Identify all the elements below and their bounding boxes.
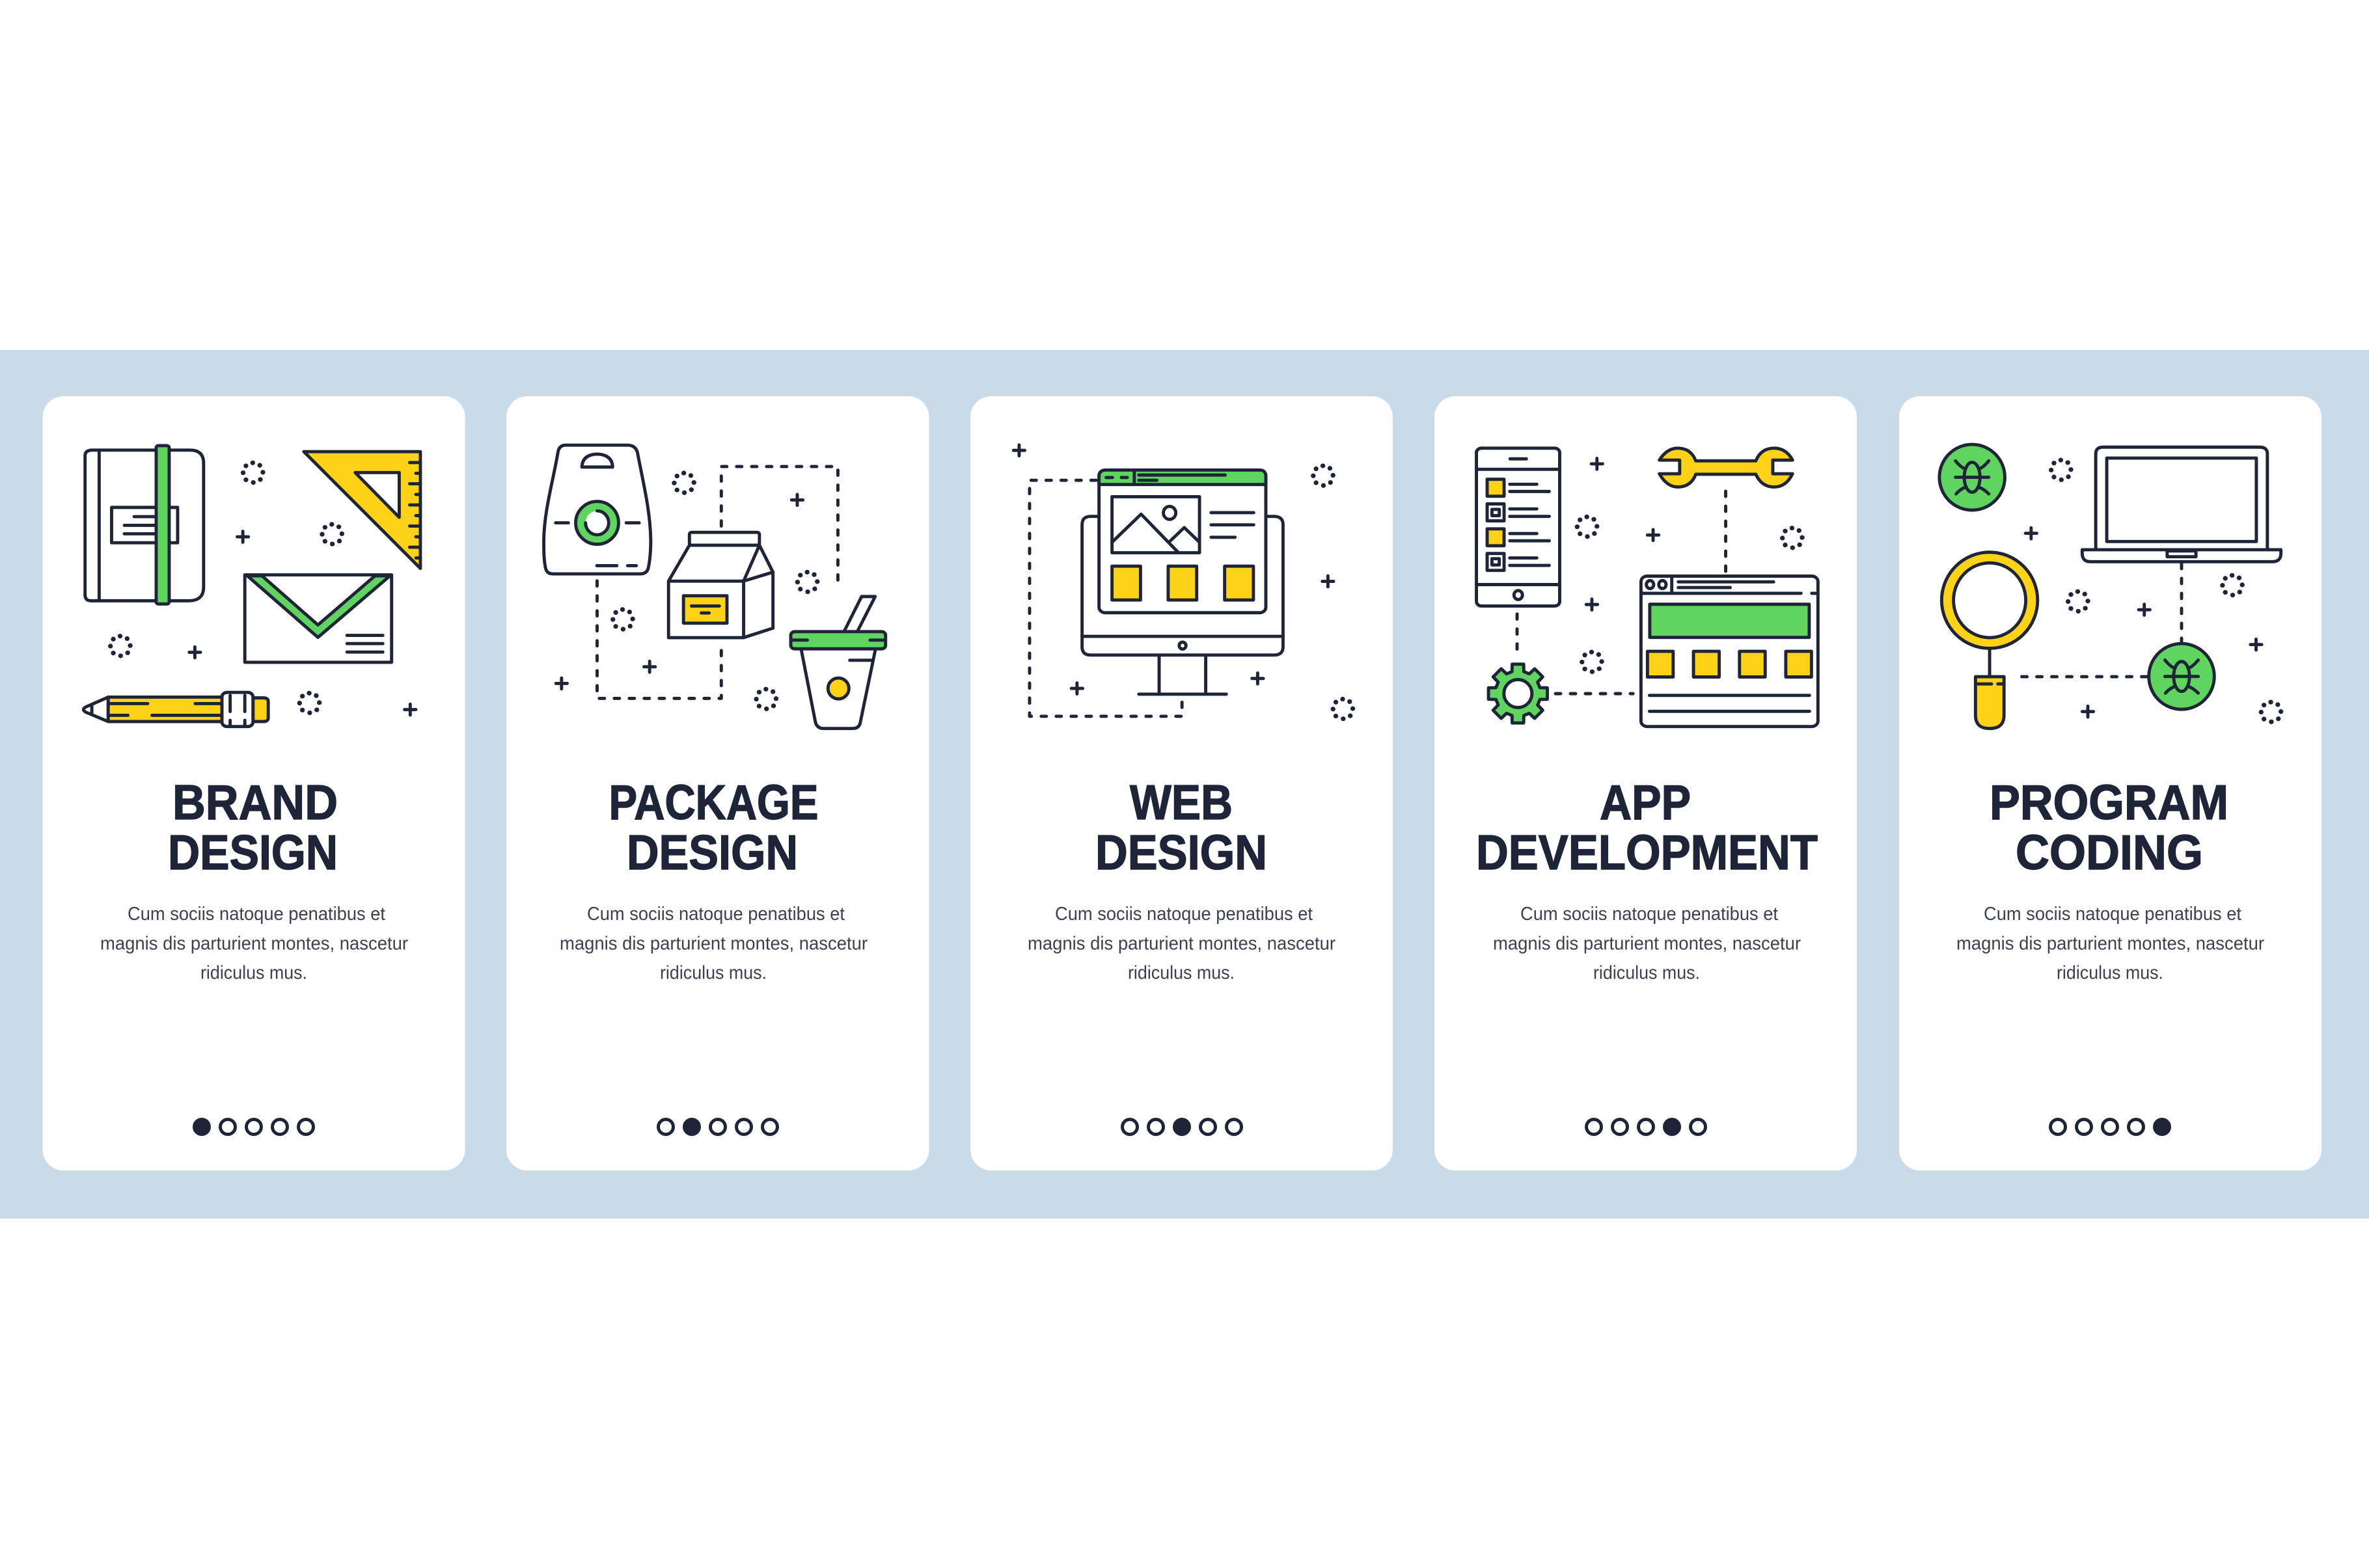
connector dashed lines [2022, 563, 2182, 677]
icon group: phone, wrench, browser [1477, 448, 1818, 727]
pagination dots [659, 1119, 777, 1135]
decorative dot rings and plus marks [556, 470, 819, 711]
pagination dots [2050, 1119, 2170, 1135]
heading [168, 775, 338, 880]
icon group: monitor with browser window [1013, 445, 1355, 721]
icon group: bag, carton, cup [544, 445, 886, 729]
decorative dot rings and plus marks [108, 461, 416, 715]
icon: browser window [1099, 470, 1266, 613]
icon: pencil [83, 692, 268, 727]
heading: PACKAGE [609, 775, 819, 830]
body text [1956, 904, 2264, 984]
icon: shopping bag [544, 445, 651, 574]
body text [100, 904, 408, 984]
heading: CODING [2016, 825, 2203, 880]
pagination dots [194, 1119, 314, 1135]
panel: program coding [1899, 396, 2321, 1170]
decorative dot rings and plus marks [1013, 445, 1355, 721]
body text: magnis dis parturient montes, nascetur [1028, 933, 1335, 954]
body text: ridiculus mus. [1128, 963, 1235, 984]
icon group: bugs, laptop, magnifier [1939, 444, 2283, 729]
icon: bug badge bottom [2149, 643, 2214, 709]
icon: gear [1488, 664, 1548, 723]
panel: package design [506, 396, 929, 1170]
body text: ridiculus mus. [1593, 963, 1700, 984]
background band [0, 350, 2369, 1219]
heading: APP [1600, 775, 1691, 830]
heading: DESIGN [1095, 825, 1267, 880]
body text: ridiculus mus. [660, 963, 767, 984]
connector dashed lines [1517, 491, 1726, 694]
heading [1476, 775, 1818, 880]
heading: DESIGN [168, 825, 338, 880]
body text [1493, 904, 1801, 984]
heading [1095, 775, 1267, 880]
icon: desktop monitor [1082, 517, 1283, 694]
body text: Cum sociis natoque penatibus et [1984, 904, 2241, 925]
body text: ridiculus mus. [200, 963, 307, 984]
icon: wrench [1660, 448, 1792, 487]
heading [609, 775, 819, 880]
decorative dot rings and plus marks [1575, 458, 1805, 674]
heading: WEB [1130, 775, 1233, 830]
body text: magnis dis parturient montes, nascetur [560, 933, 868, 954]
icon: browser layout [1641, 576, 1818, 727]
icon: notebook [85, 446, 204, 604]
body text: magnis dis parturient montes, nascetur [1493, 933, 1801, 954]
pagination dots [1122, 1119, 1242, 1135]
body text: ridiculus mus. [2057, 963, 2163, 984]
icon: carton box [668, 532, 773, 638]
panel: web design [970, 396, 1393, 1170]
connector dashed lines [597, 466, 838, 698]
pagination dots [1587, 1119, 1705, 1135]
icon: bug badge top [1939, 444, 2005, 510]
heading: DESIGN [627, 825, 798, 880]
panel: brand design [43, 396, 465, 1170]
body text: magnis dis parturient montes, nascetur [1956, 933, 2264, 954]
panel: app development [1434, 396, 1857, 1170]
heading [1990, 775, 2228, 880]
body text [1028, 904, 1335, 984]
body text [560, 904, 868, 984]
icon: drink cup [791, 597, 886, 729]
heading: DEVELOPMENT [1476, 825, 1818, 880]
body text: Cum sociis natoque penatibus et [1520, 904, 1778, 925]
icon: magnifier [1941, 552, 2038, 729]
body text: Cum sociis natoque penatibus et [1055, 904, 1313, 925]
icon: laptop [2082, 447, 2281, 561]
icon: smartphone list [1477, 448, 1559, 606]
heading: BRAND [172, 775, 338, 830]
icon group: notebook, set square, envelope, pencil [83, 446, 420, 727]
heading: PROGRAM [1990, 775, 2228, 830]
body text: magnis dis parturient montes, nascetur [100, 933, 408, 954]
icon: set square ruler [304, 452, 420, 569]
body text: Cum sociis natoque penatibus et [587, 904, 845, 925]
icon: envelope [245, 575, 392, 662]
decorative dot rings and plus marks [2025, 458, 2283, 724]
connector dashed line [1030, 480, 1182, 716]
body text: Cum sociis natoque penatibus et [128, 904, 385, 925]
